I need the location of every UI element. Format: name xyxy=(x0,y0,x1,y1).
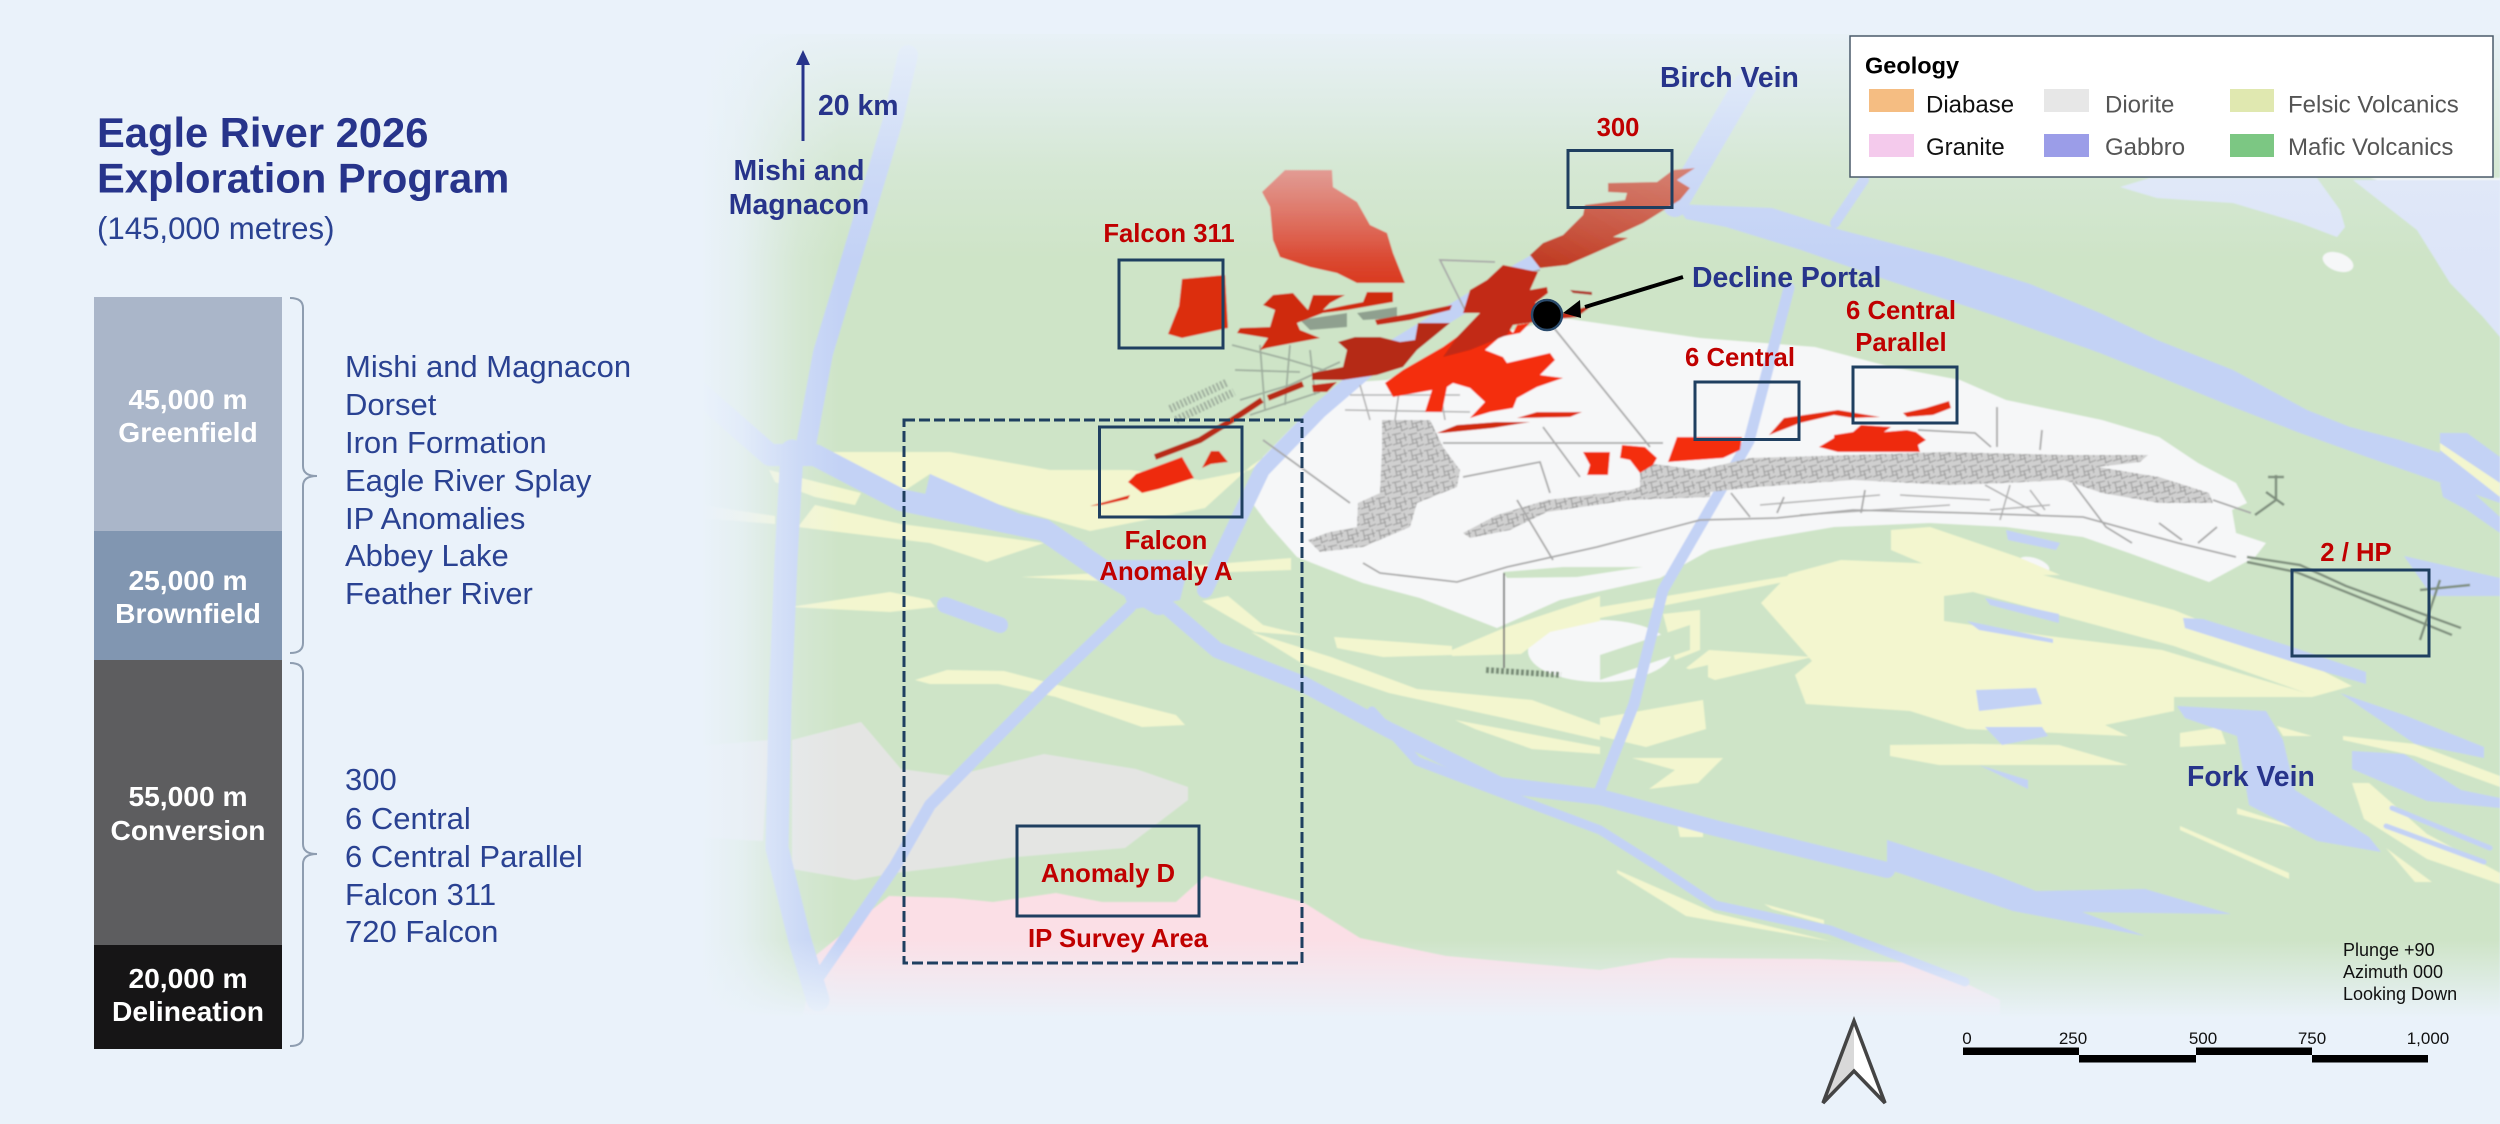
left panel: program summary xyxy=(94,109,631,1049)
segment: conversion: Conversion xyxy=(110,814,266,846)
view orientation note xyxy=(2343,940,2457,1004)
segment: delineation: 20,000 m xyxy=(128,962,248,994)
icon: north arrow xyxy=(1823,1021,1885,1103)
unit: gabbro dikes (blue) xyxy=(690,55,2490,1000)
target list: greenfield and brownfield: Mishi and Magnacon xyxy=(345,349,631,384)
pale gabbro, upper right xyxy=(2120,178,2500,337)
legend: geology: Geology xyxy=(1865,52,1959,78)
legend item: Granite: Granite xyxy=(1926,134,2005,161)
target list: conversion and delineation: Falcon 311 xyxy=(345,877,496,912)
scale bar: 1,000 xyxy=(2407,1029,2449,1048)
label: Birch Vein: Birch Vein xyxy=(1660,62,1799,94)
legend: geology xyxy=(1850,36,2493,177)
title xyxy=(97,109,509,202)
segment: delineation: Delineation xyxy=(112,995,264,1027)
decline portal marker xyxy=(1532,262,1881,330)
target: 300 xyxy=(1568,114,1672,208)
target: 2 / HP xyxy=(2292,539,2429,656)
target: 6 Central Parallel: Parallel xyxy=(1855,329,1947,357)
target: Anomaly D: Anomaly D xyxy=(1041,860,1175,888)
target: 6 Central: 6 Central xyxy=(1685,344,1795,372)
target list: conversion and delineation: 6 Central xyxy=(345,801,471,836)
legend item: Diabase: Diabase xyxy=(1926,92,2014,119)
brace: lower xyxy=(290,663,317,1046)
segment: brownfield: 25,000 m xyxy=(128,564,248,596)
IP survey area: IP Survey Area xyxy=(1028,925,1209,953)
arrow: 20 km to Mishi and Magnacon: 20 km xyxy=(818,90,899,122)
underground workings: tunnels xyxy=(1170,260,2470,675)
view orientation note: Azimuth 000 xyxy=(2343,962,2443,982)
target list: greenfield and brownfield: Feather River xyxy=(345,576,533,611)
segment: delineation xyxy=(94,945,282,1049)
segment: brownfield: Brownfield xyxy=(115,597,261,629)
scale bar xyxy=(1962,1029,2449,1062)
view orientation note: Plunge +90 xyxy=(2343,940,2435,960)
scale bar: 500 xyxy=(2189,1029,2217,1048)
segment: greenfield: Greenfield xyxy=(118,416,258,448)
stacked bar: metres by category xyxy=(94,297,282,1049)
label: Mishi and Magnacon: Mishi and xyxy=(734,155,864,187)
green band inside white body xyxy=(1503,567,1643,578)
unit: granite (pink) xyxy=(800,876,2000,1030)
legend item: Felsic Volcanics: Felsic Volcanics xyxy=(2288,92,2459,119)
decline portal marker: Decline Portal xyxy=(1692,262,1881,294)
scale bar: 0 xyxy=(1962,1029,1972,1048)
target: 300: 300 xyxy=(1597,114,1639,142)
brace: upper xyxy=(290,298,317,653)
target list: greenfield and brownfield: IP Anomalies xyxy=(345,501,525,536)
target: Anomaly D xyxy=(1017,826,1199,916)
target: 6 Central Parallel xyxy=(1846,297,1957,423)
target list: greenfield and brownfield: Iron Formation xyxy=(345,425,547,460)
label: Mishi and Magnacon: Magnacon xyxy=(729,189,869,221)
legend item: Felsic Volcanics xyxy=(2230,89,2459,119)
unit: diorite (grey) xyxy=(690,722,1188,880)
legend item: Diorite: Diorite xyxy=(2105,92,2174,119)
arrow: 20 km to Mishi and Magnacon xyxy=(796,50,899,141)
target: Falcon 311 xyxy=(1103,220,1235,348)
legend item: Mafic Volcanics: Mafic Volcanics xyxy=(2288,134,2453,161)
segment: brownfield xyxy=(94,531,282,660)
segment: conversion: 55,000 m xyxy=(128,780,248,812)
segment: conversion xyxy=(94,660,282,945)
legend item: Diabase xyxy=(1869,89,2014,119)
target: Falcon 311: Falcon 311 xyxy=(1103,220,1235,248)
target list: conversion and delineation: 6 Central Parallel xyxy=(345,839,583,874)
target: Falcon Anomaly A: Falcon xyxy=(1125,527,1207,555)
target list: greenfield and brownfield: Abbey Lake xyxy=(345,538,509,573)
target: 2 / HP: 2 / HP xyxy=(2320,539,2392,567)
scale bar: 750 xyxy=(2298,1029,2326,1048)
title: Eagle River 2026 xyxy=(97,109,428,156)
scale bar: 250 xyxy=(2059,1029,2087,1048)
target list: conversion and delineation: 300 xyxy=(345,762,397,797)
label: Fork Vein: Fork Vein xyxy=(2187,761,2315,793)
title: Exploration Program xyxy=(97,154,509,202)
unit: diorite (white main body) xyxy=(1250,178,2500,682)
legend item: Diorite xyxy=(2044,89,2174,119)
target list: greenfield and brownfield xyxy=(345,349,631,611)
subtitle: (145,000 metres) xyxy=(97,211,334,246)
target list: greenfield and brownfield: Dorset xyxy=(345,387,437,422)
ore bodies (red) xyxy=(1090,168,1951,506)
unit: green wedges through felsic volcanics xyxy=(1600,592,2306,705)
legend item: Gabbro xyxy=(2044,134,2185,161)
yellow sliver, right edge xyxy=(2440,443,2500,497)
legend item: Granite xyxy=(1869,134,2005,161)
unit: felsic volcanics (yellow) xyxy=(700,420,2500,943)
view orientation note: Looking Down xyxy=(2343,984,2457,1004)
target: Falcon Anomaly A: Anomaly A xyxy=(1099,558,1233,586)
target list: conversion and delineation xyxy=(345,762,583,949)
legend item: Gabbro: Gabbro xyxy=(2105,134,2185,161)
target: 6 Central xyxy=(1685,344,1799,440)
segment: greenfield: 45,000 m xyxy=(128,383,248,415)
IP survey area xyxy=(904,420,1302,963)
target: Falcon Anomaly A xyxy=(1099,427,1242,586)
target: 6 Central Parallel: 6 Central xyxy=(1846,297,1956,325)
target list: greenfield and brownfield: Eagle River Splay xyxy=(345,463,592,498)
segment: greenfield xyxy=(94,297,282,531)
target list: conversion and delineation: 720 Falcon xyxy=(345,914,498,949)
